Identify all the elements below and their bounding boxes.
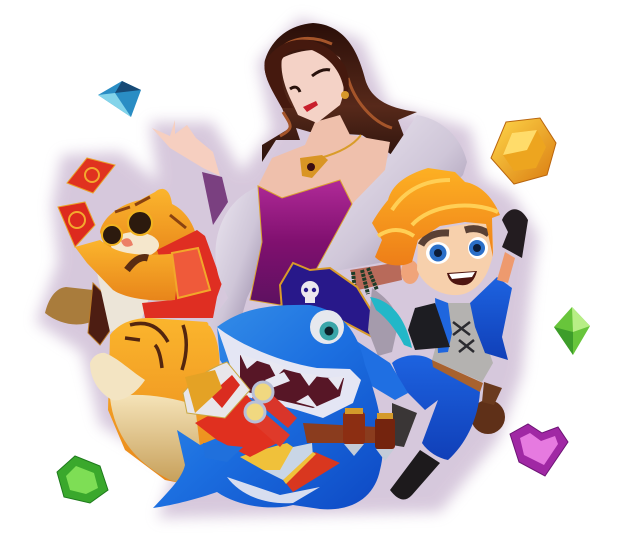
woman: purple dress <box>250 180 352 305</box>
shark: fin <box>355 340 408 400</box>
boy: mouth <box>447 271 477 285</box>
background glow <box>36 18 538 518</box>
woman: earring <box>341 91 349 99</box>
gem: pink heart <box>510 424 568 476</box>
tiger: head <box>100 189 197 262</box>
tiger: arm <box>75 240 180 301</box>
tiger: muzzle <box>111 232 159 258</box>
shark: mouth interior <box>240 355 344 408</box>
boy: phone and glove <box>408 303 450 350</box>
rocket: silver band <box>263 443 313 480</box>
rocket: red section <box>195 395 283 457</box>
tiger: red robe <box>142 230 222 318</box>
woman: front hair sweep <box>264 40 349 108</box>
woman: back hair <box>262 23 417 162</box>
boy: jacket right <box>470 277 512 360</box>
boy: back boot <box>392 403 417 447</box>
woman: fur right <box>317 115 467 272</box>
pirate hat: grey plume backing <box>368 288 398 356</box>
boy: shirt <box>432 303 493 382</box>
woman: face <box>281 50 344 123</box>
boy: head <box>417 223 494 295</box>
woman: necklace <box>300 135 361 178</box>
boy: pouch <box>471 382 505 434</box>
shark: eye <box>310 310 344 344</box>
shark: bullet two <box>375 413 395 461</box>
rocket: red cross <box>210 375 240 408</box>
tiger: belly <box>110 395 205 490</box>
tiger: dark vest <box>88 283 112 345</box>
boy: jacket left <box>435 298 452 353</box>
shark: belt <box>303 423 395 443</box>
tiger: rat in hand <box>45 287 95 324</box>
shark: blue flipper <box>203 443 243 462</box>
gem: green right <box>554 307 590 355</box>
rocket: yellow strip <box>283 452 316 484</box>
rocket: small cannons <box>245 382 297 447</box>
shark: teeth <box>240 354 344 408</box>
boy: belt <box>432 360 483 392</box>
tiger: lower body <box>108 318 220 490</box>
tiger: stripes <box>125 323 186 370</box>
woman: eyes <box>290 70 330 92</box>
boy: ear <box>401 260 419 284</box>
tiger: sunglasses <box>102 211 152 245</box>
rocket launcher <box>183 362 340 492</box>
shark: white jaw <box>217 327 361 418</box>
woman: forearm <box>350 262 402 290</box>
tiger: sleeve cuff <box>172 248 210 298</box>
shark <box>153 305 408 509</box>
tiger <box>45 189 222 490</box>
red envelopes <box>58 158 115 247</box>
rocket: yellow band <box>240 443 293 470</box>
tiger: white chest <box>97 273 150 332</box>
boy: eyes <box>426 237 488 264</box>
woman: neck and chest <box>258 115 390 204</box>
woman: bead bracelet <box>353 268 377 294</box>
woman: fur left <box>208 187 262 340</box>
gem: green bottom left <box>57 456 108 503</box>
pirate hat: teal feather <box>370 297 412 348</box>
woman: sleeve <box>202 172 228 225</box>
boy: hair strands <box>378 180 498 236</box>
rocket: silver collar <box>183 362 250 418</box>
woman: hair highlights <box>272 38 392 136</box>
boy: arm <box>497 252 515 283</box>
boy: raised glove <box>502 209 528 258</box>
woman: hand <box>152 120 220 176</box>
shark: body <box>153 305 383 509</box>
woman: lips <box>303 101 318 112</box>
boy: front boot <box>390 450 440 499</box>
gem: gold hexagon <box>491 118 556 184</box>
shark: belly <box>227 477 320 503</box>
tiger: paw <box>90 353 145 400</box>
rocket: gold tip <box>185 370 222 413</box>
pirate hat <box>280 263 412 356</box>
boy: orange hair <box>372 168 500 265</box>
gem: blue diamond <box>98 81 141 117</box>
shark: bullet one <box>343 408 365 456</box>
boy: brows <box>421 229 489 245</box>
boy <box>372 168 528 499</box>
rocket: red tail <box>285 452 340 492</box>
woman <box>152 23 467 340</box>
boy: trousers <box>392 355 480 460</box>
pirate hat: skull <box>301 281 319 303</box>
boy: laces <box>453 322 474 352</box>
